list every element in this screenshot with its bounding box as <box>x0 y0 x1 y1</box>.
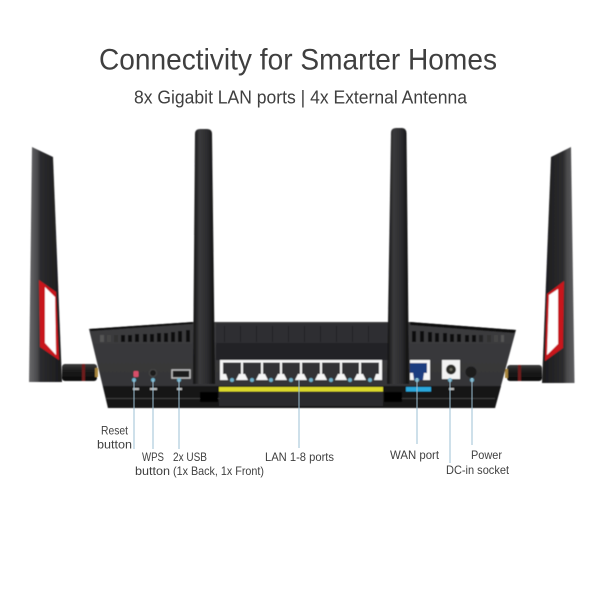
label: USB: (1x Back, 1x Front) <box>173 464 264 478</box>
power button <box>466 366 476 378</box>
label: reset button: Reset <box>101 424 129 438</box>
label: USB <box>173 450 264 478</box>
subtitle: 8x Gigabit LAN ports | 4x External Antenna <box>134 88 468 108</box>
left antenna connector <box>62 364 98 381</box>
left vents <box>100 330 190 342</box>
label: DC-in socket: DC-in socket <box>446 463 510 477</box>
inner right antenna <box>387 128 409 384</box>
right vents <box>412 331 504 342</box>
router illustration <box>29 128 574 408</box>
label: WPS button: WPS <box>142 450 164 464</box>
right antenna connector <box>505 365 542 381</box>
LAN ports panel <box>220 360 382 382</box>
yellow LAN strip <box>219 387 383 392</box>
router body <box>89 322 516 408</box>
reset button <box>134 371 138 377</box>
right wing antenna <box>542 147 574 383</box>
WPS button <box>150 370 156 376</box>
label: WPS button <box>135 450 170 478</box>
label: WPS button: button <box>135 464 170 478</box>
label: LAN ports: LAN 1-8 ports <box>265 450 334 464</box>
label: reset button: button <box>97 438 132 452</box>
USB port <box>172 370 190 378</box>
left wing antenna <box>29 147 62 382</box>
callout lines <box>134 378 472 463</box>
label: power: Power <box>471 448 502 462</box>
WAN cyan label <box>406 387 431 392</box>
port tiny labels <box>133 388 454 390</box>
label: USB: 2x USB <box>173 450 207 464</box>
label: WAN port: WAN port <box>390 448 440 462</box>
label: reset button <box>97 424 132 452</box>
inner left antenna <box>193 129 215 384</box>
white port frame <box>220 360 382 380</box>
lower band <box>103 386 501 408</box>
WAN port <box>410 360 430 380</box>
title: Connectivity for Smarter Homes <box>99 44 497 76</box>
DC-in socket <box>442 360 460 379</box>
callout dots <box>132 378 474 382</box>
